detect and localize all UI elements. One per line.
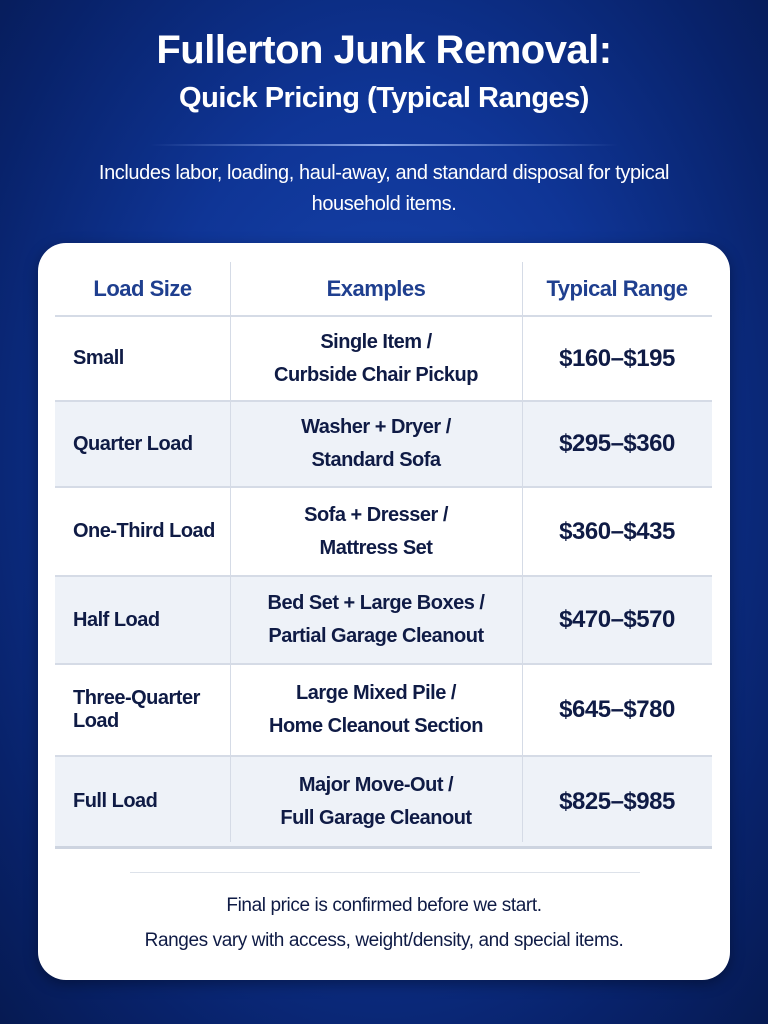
panel: pricing card [38,243,730,980]
row: half [55,577,712,665]
row: small [55,317,712,402]
row: three-quarter: Home Cleanout Section [269,715,483,737]
row: full: $825–$985 [559,788,675,814]
row: quarter: $295–$360 [559,430,675,457]
footer note: Final price is confirmed before we start. [226,895,542,916]
row: small: Small [73,347,124,369]
row: full: Full Load [73,790,157,812]
row: half: $470–$570 [559,606,675,633]
row: three-quarter: $645–$780 [559,696,675,723]
row: three-quarter [55,665,712,757]
footer note [145,895,623,951]
row: one-third: One-Third Load [73,520,215,542]
row: small: Curbside Chair Pickup [274,364,478,386]
row: half: Partial Garage Cleanout [268,625,484,647]
row: quarter: Standard Sofa [311,449,441,471]
row: half: Bed Set + Large Boxes / [268,592,484,614]
row: one-third [55,488,712,577]
row: quarter: Quarter Load [73,432,193,454]
title: Quick Pricing (Typical Ranges) [179,82,589,114]
subtitle: Includes labor, loading, haul-away, and standard disposal for typical household items. [99,162,669,215]
footer note: Ranges vary with access, weight/density, and special items. [145,930,623,951]
row: three-quarter: Three-Quarter [73,687,200,709]
row: one-third: Sofa + Dresser / [304,504,448,526]
row: full: Full Garage Cleanout [280,806,472,828]
title: Fullerton Junk Removal: [156,28,612,72]
row: half: Half Load [73,608,160,630]
row: quarter [55,402,712,488]
table header [55,262,712,317]
table header: Examples [327,276,425,300]
row: small: $160–$195 [559,344,675,372]
row: quarter: Washer + Dryer / [301,416,451,438]
row: full [55,757,712,849]
row: full: Major Move-Out / [299,774,453,796]
row: small: Single Item / [320,330,432,352]
title [156,28,612,114]
row: one-third: $360–$435 [559,518,675,544]
table header: Load Size [93,276,192,300]
row: three-quarter: Large Mixed Pile / [296,682,456,704]
table header: Typical Range [546,276,688,300]
row: one-third: Mattress Set [320,536,432,558]
row: three-quarter: Load [73,710,119,732]
